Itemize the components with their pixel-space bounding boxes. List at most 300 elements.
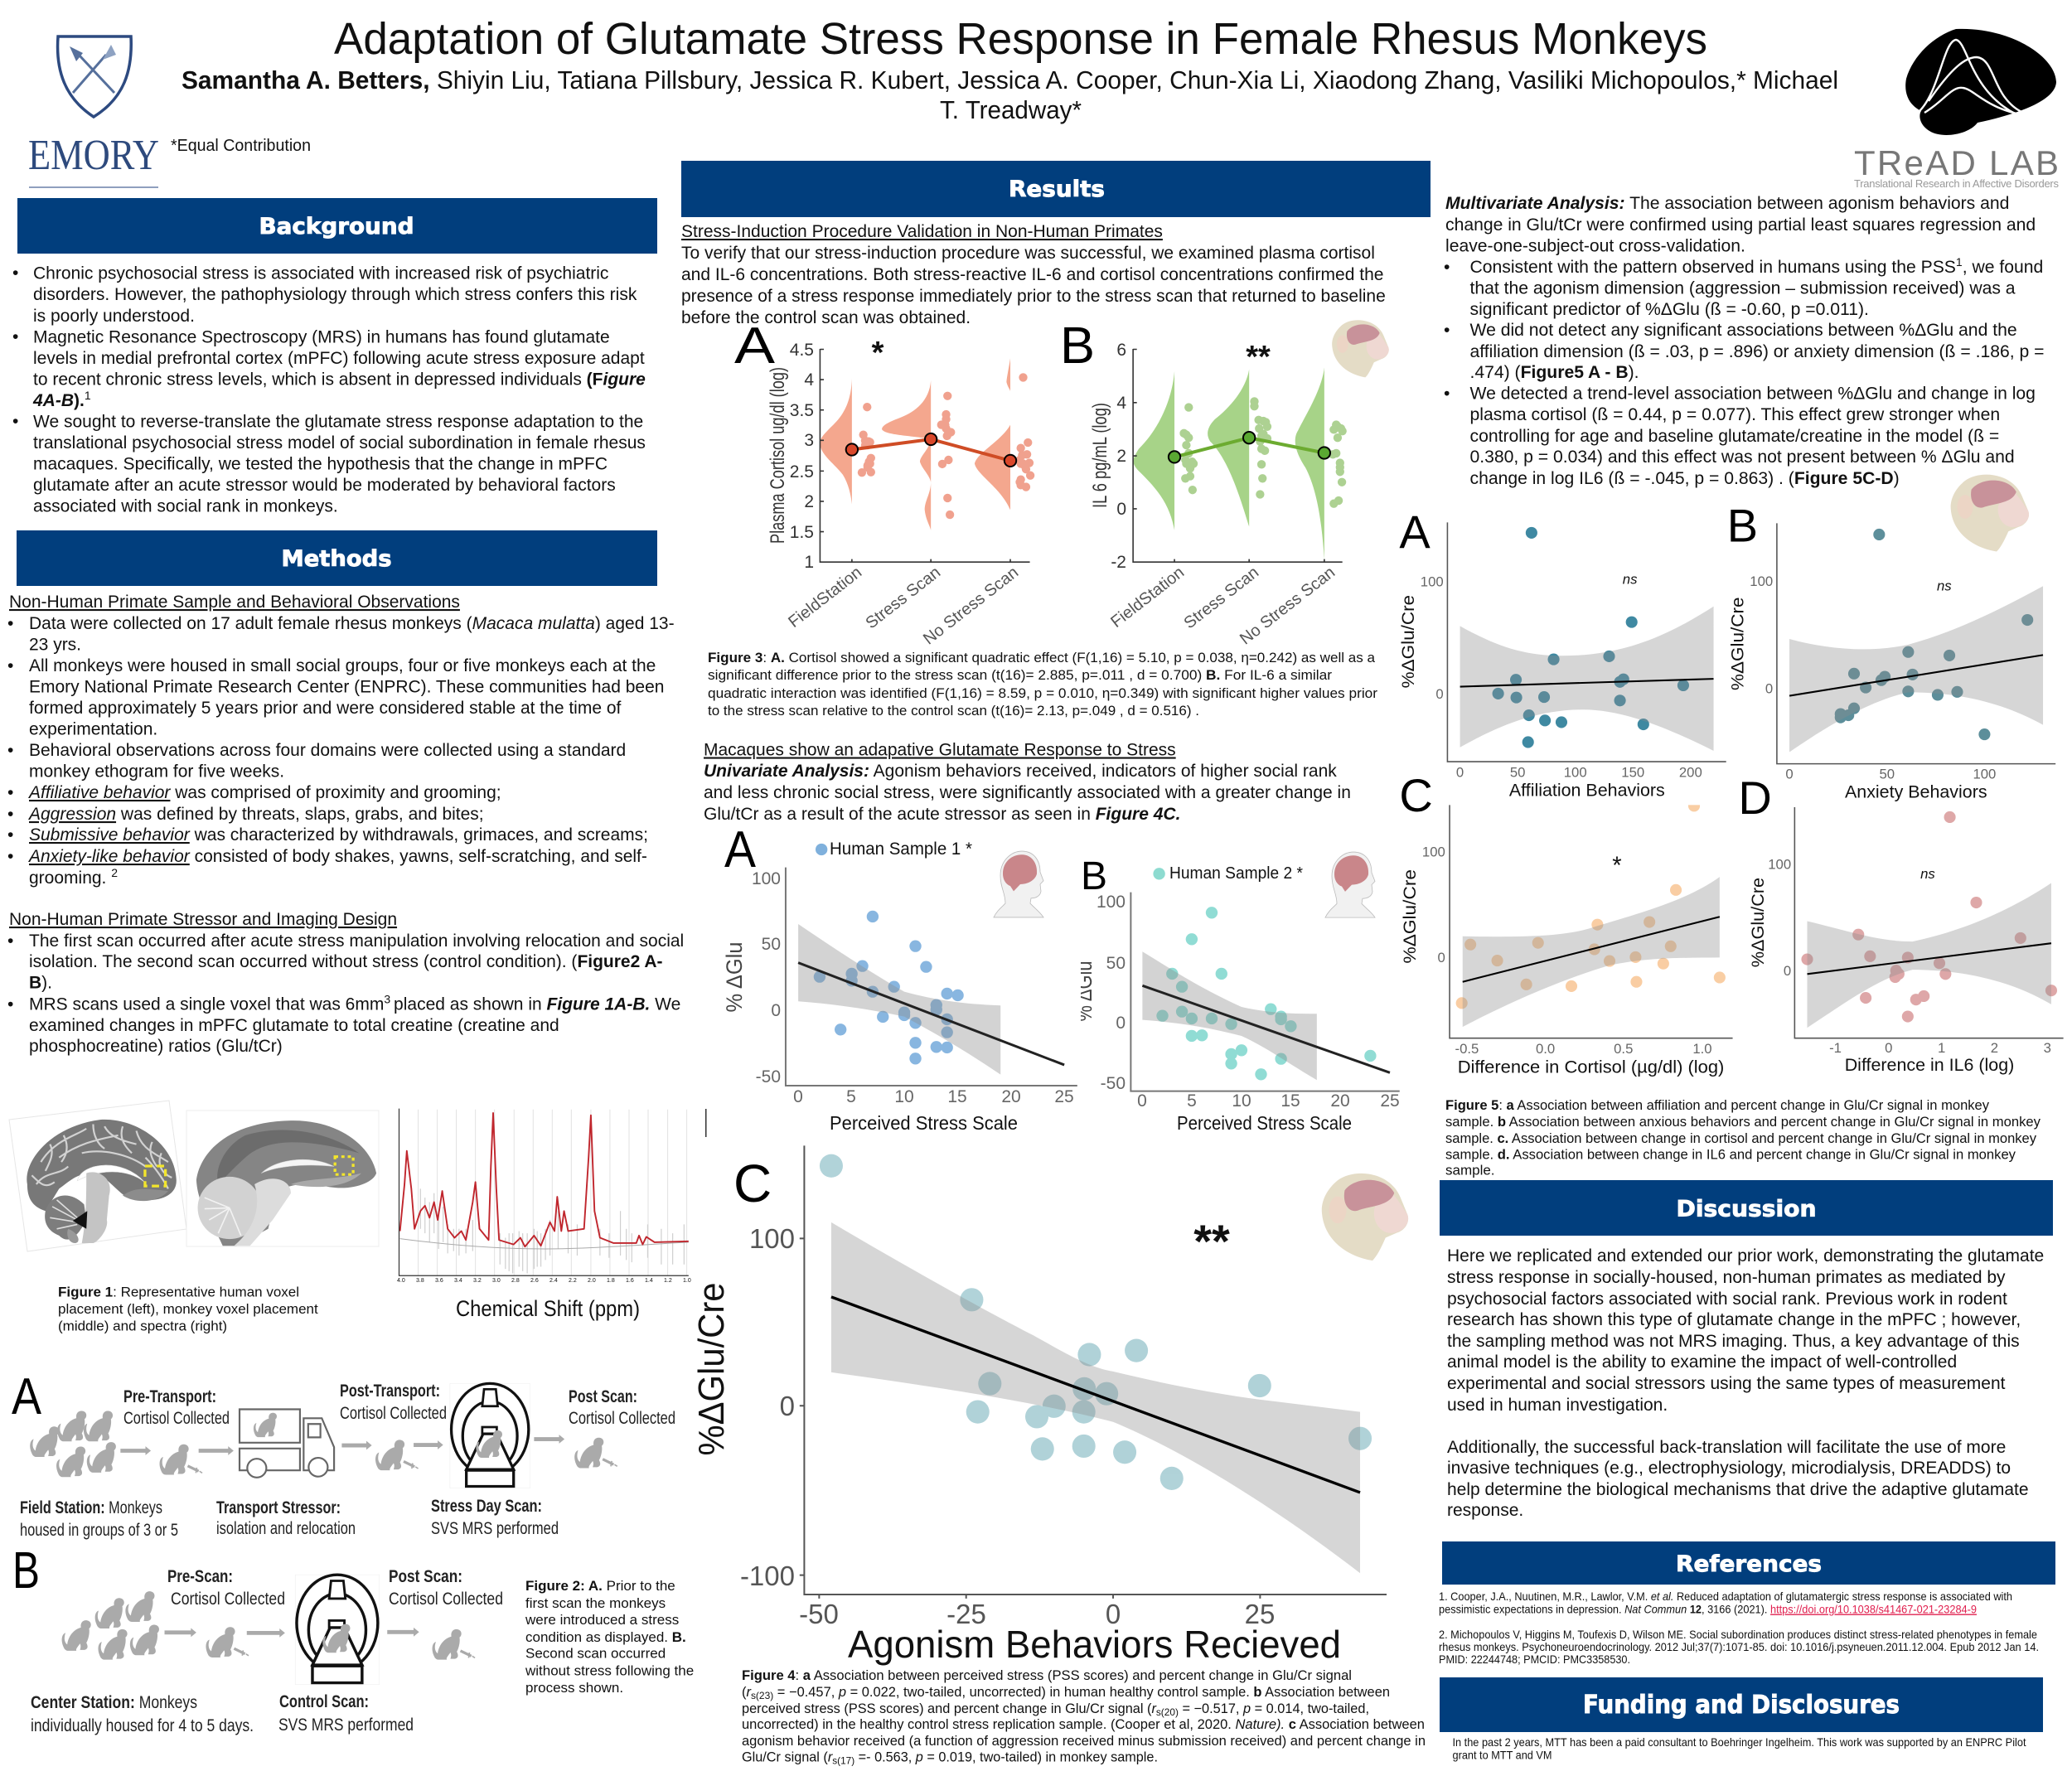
text block: stressor and imaging design: isolation. The second scan occurred without stress (control condition). (Figure2 A-	[29, 952, 663, 971]
text block: multivariate analysis: Multivariate Analysis: The association between agonism behaviors and	[1445, 194, 2009, 213]
chart: MRS spectrum: 3.4	[454, 1278, 462, 1284]
image: monkey brain voxel	[186, 1111, 379, 1246]
diagram: panel B timeline: SVS MRS performed	[278, 1716, 414, 1735]
text block: stress-induction validation: To verify that our stress-induction procedure was successful, we examined plasma cortisol	[681, 244, 1375, 263]
text block: sample and behavioral observations: Aggression was defined by threats, slaps, grabs, and bites;	[27, 805, 484, 824]
chart: 5C cortisol: 0.5	[1614, 1041, 1633, 1057]
chart: 5A affiliation: ns	[1623, 572, 1638, 588]
text block: macaques univariate analysis: and less chronic social stress, were significantly associated with a greater change in	[704, 783, 1351, 802]
caption: figure 5: Figure 5: a Association between affiliation and percent change in Glu/Cr signal in monkey	[1445, 1097, 1989, 1113]
text block: macaques univariate analysis: Univariate Analysis: Agonism behaviors received, indicators of higher social rank	[704, 762, 1337, 781]
chart: figure 4C monkey agonism scatter: %ΔGlu/Cre	[691, 1283, 732, 1455]
chart: figure 4A human sample 1: 20	[1001, 1087, 1021, 1106]
text block: multivariate analysis: .474) (Figure5 A - B).	[1470, 363, 1639, 382]
chart: 5D IL6: 0	[1784, 963, 1791, 979]
panel: results	[681, 161, 1431, 1767]
diagram: panel B timeline: individually housed for 4 to 5 days.	[31, 1716, 254, 1735]
text block: multivariate analysis: 0.380, p = 0.034) and this effect was not present between % ΔGlu and	[1470, 448, 2015, 467]
caption: figure 4: =- 0.563,	[854, 1750, 916, 1765]
caption: figure 3: significant difference prior to the stress scan (t(16)= 2.885, p=.011 , d = 0.700) B. For IL-6 a similar	[708, 667, 1332, 683]
heading: discussion: Discussion	[1676, 1197, 1817, 1222]
text block: background bullets: •	[12, 264, 18, 283]
caption: figure 4: (r	[742, 1685, 751, 1700]
text block: background bullets: translational psychosocial stress model of social subordination in female rhesus	[33, 433, 646, 452]
text block: references: rhesus monkeys. Psychoneuroendocrinology. 2012 Jul;37(7):1071-85. doi: 10.1016/j.psyneuen.2011.12.004. Epub 2012 Jan 14.	[1439, 1641, 2039, 1653]
caption: figure 4: p = 0.022, two-tailed, uncorrected) in human healthy control sample. b Association between	[839, 1685, 1391, 1700]
equal contribution note: *Equal Contribution	[171, 137, 311, 155]
chart: figure 3B IL-6 raincloud: B	[1060, 317, 1095, 375]
authors	[182, 65, 1838, 124]
chart: MRS spectrum: 3.6	[435, 1278, 443, 1284]
chart: 5A affiliation: 0	[1435, 686, 1444, 702]
text block: sample and behavioral observations: Data were collected on 17 adult female rhesus monkeys (Macaca mulatta) aged 13-	[29, 614, 675, 633]
text block: multivariate analysis: 1	[1956, 255, 1963, 269]
text block: references: pessimistic expectations in depression. Nat Commun 12, 3166 (2021). https://doi.org/10.1038/s41467-021-23284-9	[1439, 1603, 1977, 1616]
chart: 5B anxiety: 0	[1785, 766, 1794, 782]
chart: figure 3A cortisol raincloud: Stress Scan	[863, 564, 944, 632]
text block: stressor and imaging design: •	[7, 932, 13, 951]
text block: background bullets: Magnetic Resonance Spectroscopy (MRS) in humans has found glutamate	[33, 328, 610, 346]
chart: figure 3B IL-6 raincloud: No Stress Scan	[1237, 564, 1339, 648]
text block: background bullets	[12, 264, 646, 515]
text block: multivariate analysis: We did not detect any significant associations between %ΔGlu and the	[1470, 321, 2017, 340]
chart: 5D IL6: ns	[1920, 866, 1935, 882]
text block: multivariate analysis: change in Glu/tCr were confirmed using partial least squares regression and	[1445, 215, 2036, 235]
caption: figure 4: p = 0.014, two-tailed,	[1243, 1701, 1371, 1716]
text block: sample and behavioral observations: Submissive behavior was characterized by withdrawals, grimaces, and screams;	[29, 825, 648, 844]
chart: figure 3A cortisol raincloud: 2.5	[790, 462, 814, 482]
text block: discussion: Additionally, the successful back-translation will facilitate the use of more	[1447, 1438, 2006, 1457]
chart: figure 4B human sample 2	[1065, 852, 1400, 1134]
chart: figure 3B IL-6 raincloud: 4	[1116, 394, 1126, 413]
caption: figure 2: Figure 2: A. Prior to the	[525, 1578, 675, 1594]
chart: figure 3B IL-6 raincloud: 2	[1116, 447, 1126, 466]
icon: monkey head	[1322, 1174, 1408, 1261]
text block: background bullets: glutamate after an acute stressor would be moderated by behavioral factors	[33, 476, 616, 495]
chart: figure 3A cortisol raincloud	[734, 317, 1034, 648]
text block: sample and behavioral observations: •	[7, 614, 13, 633]
chart: MRS spectrum: 3.8	[416, 1278, 424, 1284]
text block: discussion: used in human investigation.	[1447, 1396, 1668, 1415]
chart: 5A affiliation: 100	[1564, 764, 1587, 780]
caption: figure 5: sample. d. Association between change in IL6 and percent change in Glu/Cr signal in monkey	[1445, 1147, 2016, 1162]
text block: references	[1439, 1590, 2039, 1666]
text block: multivariate analysis: plasma cortisol (ß = 0.44, p = 0.077). This effect grew stronger when	[1470, 405, 2000, 424]
text block: multivariate analysis: that the agonism dimension (aggression – submission received) was a	[1470, 278, 2016, 298]
chart: figure 4C monkey agonism scatter: Agonism Behaviors Recieved	[848, 1623, 1341, 1666]
panel: references	[1439, 1541, 2055, 1666]
heading: funding	[1440, 1677, 2043, 1732]
diagram: panel B timeline: Control Scan:	[279, 1692, 369, 1711]
chart: 5D IL6: Difference in IL6 (log)	[1845, 1055, 2014, 1075]
figure 1: voxel placement and spectrum	[9, 1101, 691, 1334]
diagram: panel B timeline: Cortisol Collected	[389, 1590, 503, 1609]
chart: 5B anxiety: B	[1727, 499, 1758, 551]
heading: methods: Methods	[282, 546, 391, 572]
text block: sample and behavioral observations: Behavioral observations across four domains were collected using a standard	[29, 741, 626, 760]
chart: 5C cortisol: 0.0	[1536, 1041, 1555, 1057]
text block: stressor and imaging design	[7, 910, 684, 1056]
text block: macaques univariate analysis: Glu/tCr as a result of the acute stressor as seen in Figure 4C.	[704, 805, 1180, 824]
panel: funding and disclosures	[1440, 1677, 2043, 1762]
logo: TReAD Lab: TReAD LAB	[1854, 143, 2059, 182]
chart: figure 3B IL-6 raincloud: FieldStation	[1107, 564, 1188, 632]
caption: figure 4: Glu/Cr signal (r	[742, 1750, 832, 1765]
caption: figure 2: Second scan occurred	[525, 1646, 666, 1661]
chart: figure 4A human sample 1: 0	[771, 1001, 781, 1020]
text block: stress-induction validation: before the control scan was obtained.	[681, 308, 971, 327]
chart: MRS spectrum: 2.2	[569, 1278, 577, 1284]
caption: figure 1: (middle) and spectra (right)	[58, 1318, 227, 1334]
panel: methods	[7, 530, 684, 1056]
authors: Samantha A. Betters, Shiyin Liu, Tatiana Pillsbury, Jessica R. Kubert, Jessica A. Cooper, Chun-Xia Li, Xiaodong Zhang, Vasiliki Michopoulos,* Michael	[182, 65, 1838, 94]
chart: 5A affiliation: A	[1399, 506, 1431, 558]
icon: human head	[994, 851, 1043, 917]
caption: figure 5: sample. b Association between anxious behaviors and percent change in Glu/Cr signal in monkey	[1445, 1114, 2041, 1130]
chart: MRS spectrum: 1.8	[607, 1278, 615, 1284]
chart: figure 4B human sample 2: Perceived Stress Scale	[1177, 1112, 1352, 1134]
chart: figure 3A cortisol raincloud: 1	[804, 553, 814, 572]
chart: 5D IL6: %ΔGlu/Cre	[1748, 878, 1768, 967]
diagram: panel A timeline: Field Station: Monkeys	[20, 1498, 162, 1517]
text block: sample and behavioral observations: •	[7, 847, 13, 866]
text block: sample and behavioral observations: Emory National Primate Research Center (ENPRC). These communities had been	[29, 678, 664, 696]
icon: monkey head (figure 5)	[1951, 475, 2029, 552]
chart: 5D IL6	[1738, 772, 2064, 1075]
text block: multivariate analysis	[1444, 194, 2044, 488]
heading: results	[681, 161, 1431, 217]
chart: MRS spectrum: 2.8	[511, 1278, 520, 1284]
chart: figure 3A cortisol raincloud: 2	[804, 492, 814, 511]
chart: 5D IL6: 0	[1885, 1040, 1892, 1056]
chart: 5D IL6: D	[1738, 772, 1772, 824]
chart: 5B anxiety: 0	[1765, 680, 1773, 696]
heading: background	[17, 198, 657, 254]
chart: 5B anxiety: ns	[1937, 578, 1952, 593]
caption: figure 5: sample. c. Association between change in cortisol and percent change in Glu/Cr signal in monkey	[1445, 1130, 2036, 1146]
caption: figure 1: Figure 1: Representative human voxel	[58, 1285, 299, 1299]
image: human brain voxel	[9, 1101, 186, 1251]
caption: figure 4: perceived stress (PSS scores) and percent change in Glu/Cr signal (r	[742, 1701, 1156, 1716]
chart: 5C cortisol: 0	[1437, 950, 1445, 965]
text block: background bullets: Chronic psychosocial stress is associated with increased risk of psychiatric	[33, 264, 608, 283]
caption: figure 4: = −0.457,	[773, 1685, 839, 1700]
text block: sample and behavioral observations: monkey ethogram for five weeks.	[29, 762, 284, 781]
chart: figure 3A cortisol raincloud: 3.5	[790, 401, 814, 420]
chart: figure 4C monkey agonism scatter: 25	[1245, 1599, 1275, 1629]
text block: stress-induction validation	[681, 222, 1386, 327]
chart: figure 4C monkey agonism scatter: C	[733, 1154, 772, 1213]
chart: figure 3A cortisol raincloud: A	[734, 317, 776, 375]
caption: figure 2	[525, 1578, 694, 1696]
text block: stress-induction validation: presence of a stress response immediately prior to the stress scan that returned to baseline	[681, 287, 1386, 306]
text block: discussion: the sampling method was not MRS imaging. Thus, a key advantage of this	[1447, 1332, 2020, 1351]
diagram: panel B timeline: B	[12, 1542, 40, 1599]
text block: background bullets: •	[12, 412, 18, 431]
chart: 5A affiliation: 100	[1421, 574, 1444, 590]
caption: figure 4	[742, 1668, 1426, 1767]
heading: methods	[17, 530, 657, 586]
text block: macaques univariate analysis: Macaques show an adapative Glutamate Response to Stress	[704, 741, 1176, 759]
text block: background bullets: is poorly understood.	[33, 307, 195, 326]
text block: stressor and imaging design: The first scan occurred after acute stress manipulation involving relocation and social	[29, 932, 684, 951]
chart: figure 4A human sample 1: Perceived Stress Scale	[830, 1112, 1018, 1134]
chart: figure 4B human sample 2: 15	[1280, 1091, 1300, 1111]
text block: stressor and imaging design: B).	[29, 973, 52, 993]
chart: figure 4B human sample 2: 5	[1187, 1091, 1197, 1111]
chart: figure 4C monkey agonism scatter: 0	[1106, 1599, 1121, 1629]
text block: background bullets: macaques. Specifically, we tested the hypothesis that the change in mPFC	[33, 454, 608, 474]
chart: 5B anxiety: %ΔGlu/Cre	[1728, 598, 1748, 690]
chart: 5D IL6: 100	[1768, 857, 1791, 873]
text block: discussion: invasive techniques (e.g., electrophysiology, microdialysis, DREADDS) to	[1447, 1459, 2011, 1478]
diagram: panel A timeline: Cortisol Collected	[340, 1404, 447, 1423]
diagram: panel A timeline: isolation and relocation	[216, 1519, 356, 1538]
text block: multivariate analysis: Consistent with the pattern observed in humans using the PSS	[1470, 258, 1956, 277]
chart: figure 4C monkey agonism scatter: 0	[780, 1391, 795, 1421]
chart: figure 3A cortisol raincloud: FieldStation	[785, 564, 865, 632]
chart: MRS spectrum: 1.4	[645, 1278, 653, 1284]
diagram: panel B timeline: Post Scan:	[389, 1567, 462, 1586]
chart: figure 4C monkey agonism scatter	[691, 1145, 1408, 1666]
chart: 5A affiliation: 200	[1679, 764, 1702, 780]
chart: 5A affiliation: Affiliation Behaviors	[1509, 780, 1665, 800]
chart: figure 3A cortisol raincloud: *	[872, 336, 884, 370]
icon: monkey head	[1332, 320, 1389, 377]
chart: figure 4A human sample 1: 100	[752, 869, 781, 888]
chart: 5C cortisol	[1399, 769, 1733, 1077]
text block: background bullets: levels in medial prefrontal cortex (mPFC) following acute stress exposure adapt	[33, 349, 645, 368]
caption: figure 2: condition as displayed. B.	[525, 1629, 686, 1645]
text block: discussion: research has shown this type of glutamate change in the mPFC ; however,	[1447, 1310, 2021, 1329]
caption: figure 3: Figure 3: A. Cortisol showed a significant quadratic effect (F(1,16) = 5.10, p = 0.038, η=0.242) as well as a	[708, 650, 1376, 665]
chart: figure 4B human sample 2: 20	[1330, 1091, 1350, 1111]
chart: figure 3A cortisol raincloud: 4	[804, 370, 814, 390]
text block: discussion: stress response in socially-housed, non-human primates as mediated by	[1447, 1268, 2006, 1287]
caption: figure 2: process shown.	[525, 1680, 623, 1696]
diagram: panel A timeline: A	[12, 1368, 42, 1425]
chart: figure 4B human sample 2: -50	[1101, 1074, 1126, 1093]
logo: TReAD Lab: Translational Research in Affective Disorders	[1854, 177, 2059, 190]
text block: sample and behavioral observations: 23 yrs.	[29, 635, 81, 655]
text block: sample and behavioral observations: formed approximately 5 years prior and were considered stable at the time of	[29, 699, 622, 718]
text block: multivariate analysis: , we found	[1963, 258, 2043, 277]
caption: figure 4: = −0.517,	[1179, 1701, 1243, 1716]
chart: figure 3A cortisol raincloud: 4.5	[790, 341, 814, 360]
text block: discussion: psychosocial factors associated with social rank. Previous work in rodent	[1447, 1290, 2007, 1309]
caption: figure 3: quadratic interaction was identified (F(1,16) = 8.59, p = 0.010, η=0.349) with significant higher values prior	[708, 685, 1377, 701]
chart: figure 3A cortisol raincloud: 3	[804, 431, 814, 450]
heading: funding: Funding and Disclosures	[1583, 1691, 1900, 1720]
text block: funding: In the past 2 years, MTT has been a paid consultant to Boehringer Ingelheim. This work was supported by an ENPRC Pilot	[1452, 1736, 2026, 1749]
chart: 5D IL6: 1	[1938, 1040, 1945, 1056]
diagram: panel B timeline: Cortisol Collected	[171, 1590, 285, 1609]
caption: figure 1: placement (left), monkey voxel placement	[58, 1301, 318, 1317]
text block: references: 2. Michopoulos V, Higgins M, Toufexis D, Wilson ME. Social subordination produces distinct stress-related phenotypes in female	[1439, 1628, 2037, 1641]
logo: TReAD Lab	[1854, 29, 2059, 190]
chart: figure 4B human sample 2: 0	[1137, 1091, 1147, 1111]
chart: figure 4C monkey agonism scatter: -100	[740, 1561, 795, 1591]
caption: figure 4: s(23)	[751, 1690, 773, 1701]
icon: human head	[1325, 852, 1375, 917]
text block: background bullets: •	[12, 327, 18, 346]
caption: figure 4: uncorrected) in the healthy control stress replication sample. (Cooper et al, 2020. Nature). c Association between	[742, 1717, 1425, 1732]
caption: figure 4: Figure 4: a Association between perceived stress (PSS scores) and percent change in Glu/Cr signal	[742, 1668, 1352, 1683]
chart: 5B anxiety	[1727, 499, 2055, 801]
chart: 5C cortisol: -0.5	[1455, 1041, 1479, 1057]
text block: sample and behavioral observations: All monkeys were housed in small social groups, four or five monkeys each at the	[29, 656, 656, 675]
text block: stressor and imaging design: 3	[384, 993, 394, 1006]
text block: stressor and imaging design: phosphocreatine) ratios (Glu/tCr)	[29, 1037, 283, 1056]
text block: background bullets: to recent chronic stress levels, which is absent in depressed individuals (Figure	[33, 370, 646, 390]
text block: sample and behavioral observations: experimentation.	[29, 719, 157, 739]
chart: figure 4B human sample 2: 25	[1380, 1091, 1400, 1111]
text block: background bullets: associated with social rank in monkeys.	[33, 497, 338, 515]
chart: 5A affiliation: 0	[1456, 764, 1464, 780]
chart: figure 4A human sample 1: 25	[1054, 1087, 1074, 1106]
text block: stressor and imaging design: Non-Human Primate Stressor and Imaging Design	[9, 910, 397, 929]
chart: 5C cortisol: 100	[1422, 844, 1445, 860]
chart: 5C cortisol: %ΔGlu/Cre	[1400, 869, 1420, 963]
text block: stressor and imaging design: examined changes in mPFC glutamate to total creatine (creatine and	[29, 1016, 559, 1035]
chart: figure 3B IL-6 raincloud: IL 6 pg/mL (log)	[1089, 403, 1111, 508]
chart: figure 4B human sample 2: B	[1081, 854, 1107, 898]
chart: figure 4A human sample 1: 10	[894, 1087, 914, 1106]
text block: multivariate analysis: controlling for age and baseline glutamate/creatine in the model (ß =	[1470, 427, 1999, 446]
chart: 5D IL6: 2	[1991, 1040, 1998, 1056]
text block: multivariate analysis: •	[1444, 258, 1450, 277]
caption: figure 2: first scan the monkeys	[525, 1595, 666, 1611]
chart: figure 4A human sample 1: A	[724, 821, 757, 878]
chart: 5B anxiety: Anxiety Behaviors	[1845, 782, 1987, 801]
chart: figure 3B IL-6 raincloud: -2	[1111, 553, 1126, 572]
text block: sample and behavioral observations: •	[7, 783, 13, 802]
chart: MRS spectrum: 3.2	[473, 1278, 482, 1284]
chart: 5C cortisol: *	[1612, 852, 1622, 879]
chart: figure 3B IL-6 raincloud	[1060, 317, 1389, 648]
text block: multivariate analysis: significant predictor of %ΔGlu (ß = -0.60, p =0.011).	[1470, 300, 1869, 319]
chart: figure 4B human sample 2: 50	[1106, 954, 1126, 973]
chart: MRS spectrum	[397, 1109, 691, 1321]
text block: sample and behavioral observations: Affiliative behavior was comprised of proximity and grooming;	[27, 783, 501, 802]
chart: figure 4B human sample 2: Human Sample 2 *	[1169, 864, 1303, 883]
chart: 5B anxiety: 100	[1750, 573, 1773, 589]
chart: figure 4A human sample 1: 0	[793, 1087, 803, 1106]
chart: 5B anxiety: 50	[1879, 766, 1895, 782]
decorative fragment: spectrum edge	[705, 1109, 706, 1137]
text block: sample and behavioral observations: •	[7, 825, 13, 844]
chart: figure 3A cortisol raincloud: No Stress Scan	[920, 564, 1022, 648]
diagram: panel A timeline	[12, 1368, 675, 1540]
text block: stressor and imaging design: placed as shown in	[394, 994, 547, 1014]
diagram: panel B timeline: Center Station: Monkeys	[31, 1693, 197, 1712]
panel: background	[12, 198, 657, 515]
chart: figure 4A human sample 1	[722, 821, 1077, 1134]
text block: sample and behavioral observations: 2	[111, 866, 118, 879]
chart: figure 3B IL-6 raincloud: 6	[1116, 341, 1126, 360]
chart: figure 3B IL-6 raincloud: Stress Scan	[1181, 564, 1262, 632]
caption: figure 5: sample.	[1445, 1162, 1495, 1178]
text block: background bullets: We sought to reverse-translate the glutamate stress response adaptation to the	[33, 413, 643, 431]
text block: funding: grant to MTT and VM	[1452, 1749, 1552, 1762]
text block: discussion: animal model is the ability to examine the impact of well-controlled	[1447, 1353, 1957, 1372]
chart: figure 4C monkey agonism scatter: 100	[749, 1223, 795, 1254]
chart: figure 4B human sample 2: 0	[1116, 1014, 1126, 1033]
chart: 5A affiliation	[1398, 506, 1726, 800]
caption: figure 4: s(20)	[1156, 1706, 1179, 1718]
chart: MRS spectrum: 2.0	[588, 1278, 596, 1284]
caption: figure 5	[1445, 1097, 2041, 1178]
chart: figure 3A cortisol raincloud: Plasma Cortisol ug/dl (log)	[767, 367, 789, 544]
text block: references: 1. Cooper, J.A., Nuutinen, M.R., Lawlor, V.M. et al. Reduced adaptation of glutamatergic stress response is associated with	[1439, 1590, 2012, 1603]
text block: multivariate analysis: We detected a trend-level association between %ΔGlu and change in log	[1470, 385, 2036, 403]
chart: 5C cortisol: 1.0	[1692, 1041, 1712, 1057]
chart: MRS spectrum: 1.6	[626, 1278, 634, 1284]
text block: sample and behavioral observations: Anxiety-like behavior consisted of body shakes, yawns, self-scratching, and self-	[27, 847, 647, 866]
text block: stress-induction validation: and IL-6 concentrations. Both stress-reactive IL-6 and cortisol concentrations confirmed the	[681, 265, 1383, 284]
figure 2: stress-day and control-day timelines	[12, 1368, 694, 1735]
heading: discussion	[1440, 1180, 2053, 1236]
diagram: panel A timeline: housed in groups of 3 or 5	[20, 1521, 178, 1540]
chart: figure 4C monkey agonism scatter: -50	[799, 1599, 839, 1629]
text block: sample and behavioral observations: •	[7, 805, 13, 824]
text block: sample and behavioral observations: •	[7, 741, 13, 760]
text block: discussion: response.	[1447, 1501, 1523, 1520]
caption: figure 3	[708, 650, 1377, 719]
chart: figure 4C monkey agonism scatter: **	[1193, 1215, 1230, 1267]
chart: figure 3A cortisol raincloud: 1.5	[790, 523, 814, 542]
chart: MRS spectrum: 1.0	[683, 1278, 691, 1284]
text block: stressor and imaging design: MRS scans used a single voxel that was 6mm	[29, 994, 384, 1014]
diagram: panel A timeline: Cortisol Collected	[123, 1409, 230, 1428]
chart: figure 4A human sample 1: 50	[762, 935, 781, 954]
chart: 5A affiliation: 50	[1510, 764, 1525, 780]
chart: figure 4A human sample 1: 15	[947, 1087, 967, 1106]
diagram: panel A timeline: Post Scan:	[569, 1387, 637, 1406]
text block: multivariate analysis: •	[1444, 385, 1450, 403]
chart: MRS spectrum: 4.0	[397, 1278, 405, 1284]
heading: results: Results	[1009, 177, 1105, 202]
caption: figure 1	[58, 1285, 318, 1334]
text block: discussion: help determine the biological mechanisms that drive the adaptive glutamate	[1447, 1480, 2029, 1499]
diagram: panel A timeline: Pre-Transport:	[123, 1387, 216, 1406]
panel: discussion	[1440, 1180, 2053, 1520]
caption: figure 4: p = 0.019, two-tailed) in monkey sample.	[916, 1750, 1161, 1765]
chart: figure 4A human sample 1: -50	[756, 1067, 781, 1086]
text block: sample and behavioral observations: grooming.	[29, 869, 106, 888]
chart: figure 4A human sample 1: Human Sample 1 *	[830, 840, 972, 859]
text block: sample and behavioral observations	[7, 593, 675, 888]
text block: multivariate analysis: change in log IL6 (ß = -.045, p = 0.863) . (Figure 5C-D)	[1470, 469, 1900, 488]
text block: background bullets: 1	[85, 389, 91, 402]
chart: figure 3B IL-6 raincloud: **	[1246, 340, 1271, 375]
chart: figure 4A human sample 1: % ΔGlu	[722, 941, 747, 1013]
text block: multivariate analysis: affiliation dimension (ß = .03, p = .896) or anxiety dimension (ß = .186, p =	[1470, 342, 2044, 361]
chart: 5C cortisol: Difference in Cortisol (µg/dl) (log)	[1458, 1057, 1724, 1077]
text block: stressor and imaging design: •	[7, 994, 13, 1014]
text block: sample and behavioral observations: •	[7, 656, 13, 675]
chart: 5D IL6: -1	[1829, 1040, 1842, 1056]
text block: multivariate analysis: •	[1444, 321, 1450, 340]
chart: 5B anxiety: 100	[1973, 766, 1996, 782]
text block: references: PMID: 22244748; PMCID: PMC3358530.	[1439, 1653, 1630, 1666]
caption: figure 2: were introduced a stress	[525, 1612, 679, 1628]
text block: multivariate analysis: leave-one-subject-out cross-validation.	[1445, 237, 1745, 255]
text block: background bullets: disorders. However, the pathophysiology through which stress confers this risk	[33, 285, 637, 304]
diagram: panel A timeline: SVS MRS performed	[431, 1519, 559, 1538]
caption: figure 4: s(17)	[832, 1755, 854, 1767]
diagram: panel A timeline: Post-Transport:	[340, 1382, 440, 1401]
